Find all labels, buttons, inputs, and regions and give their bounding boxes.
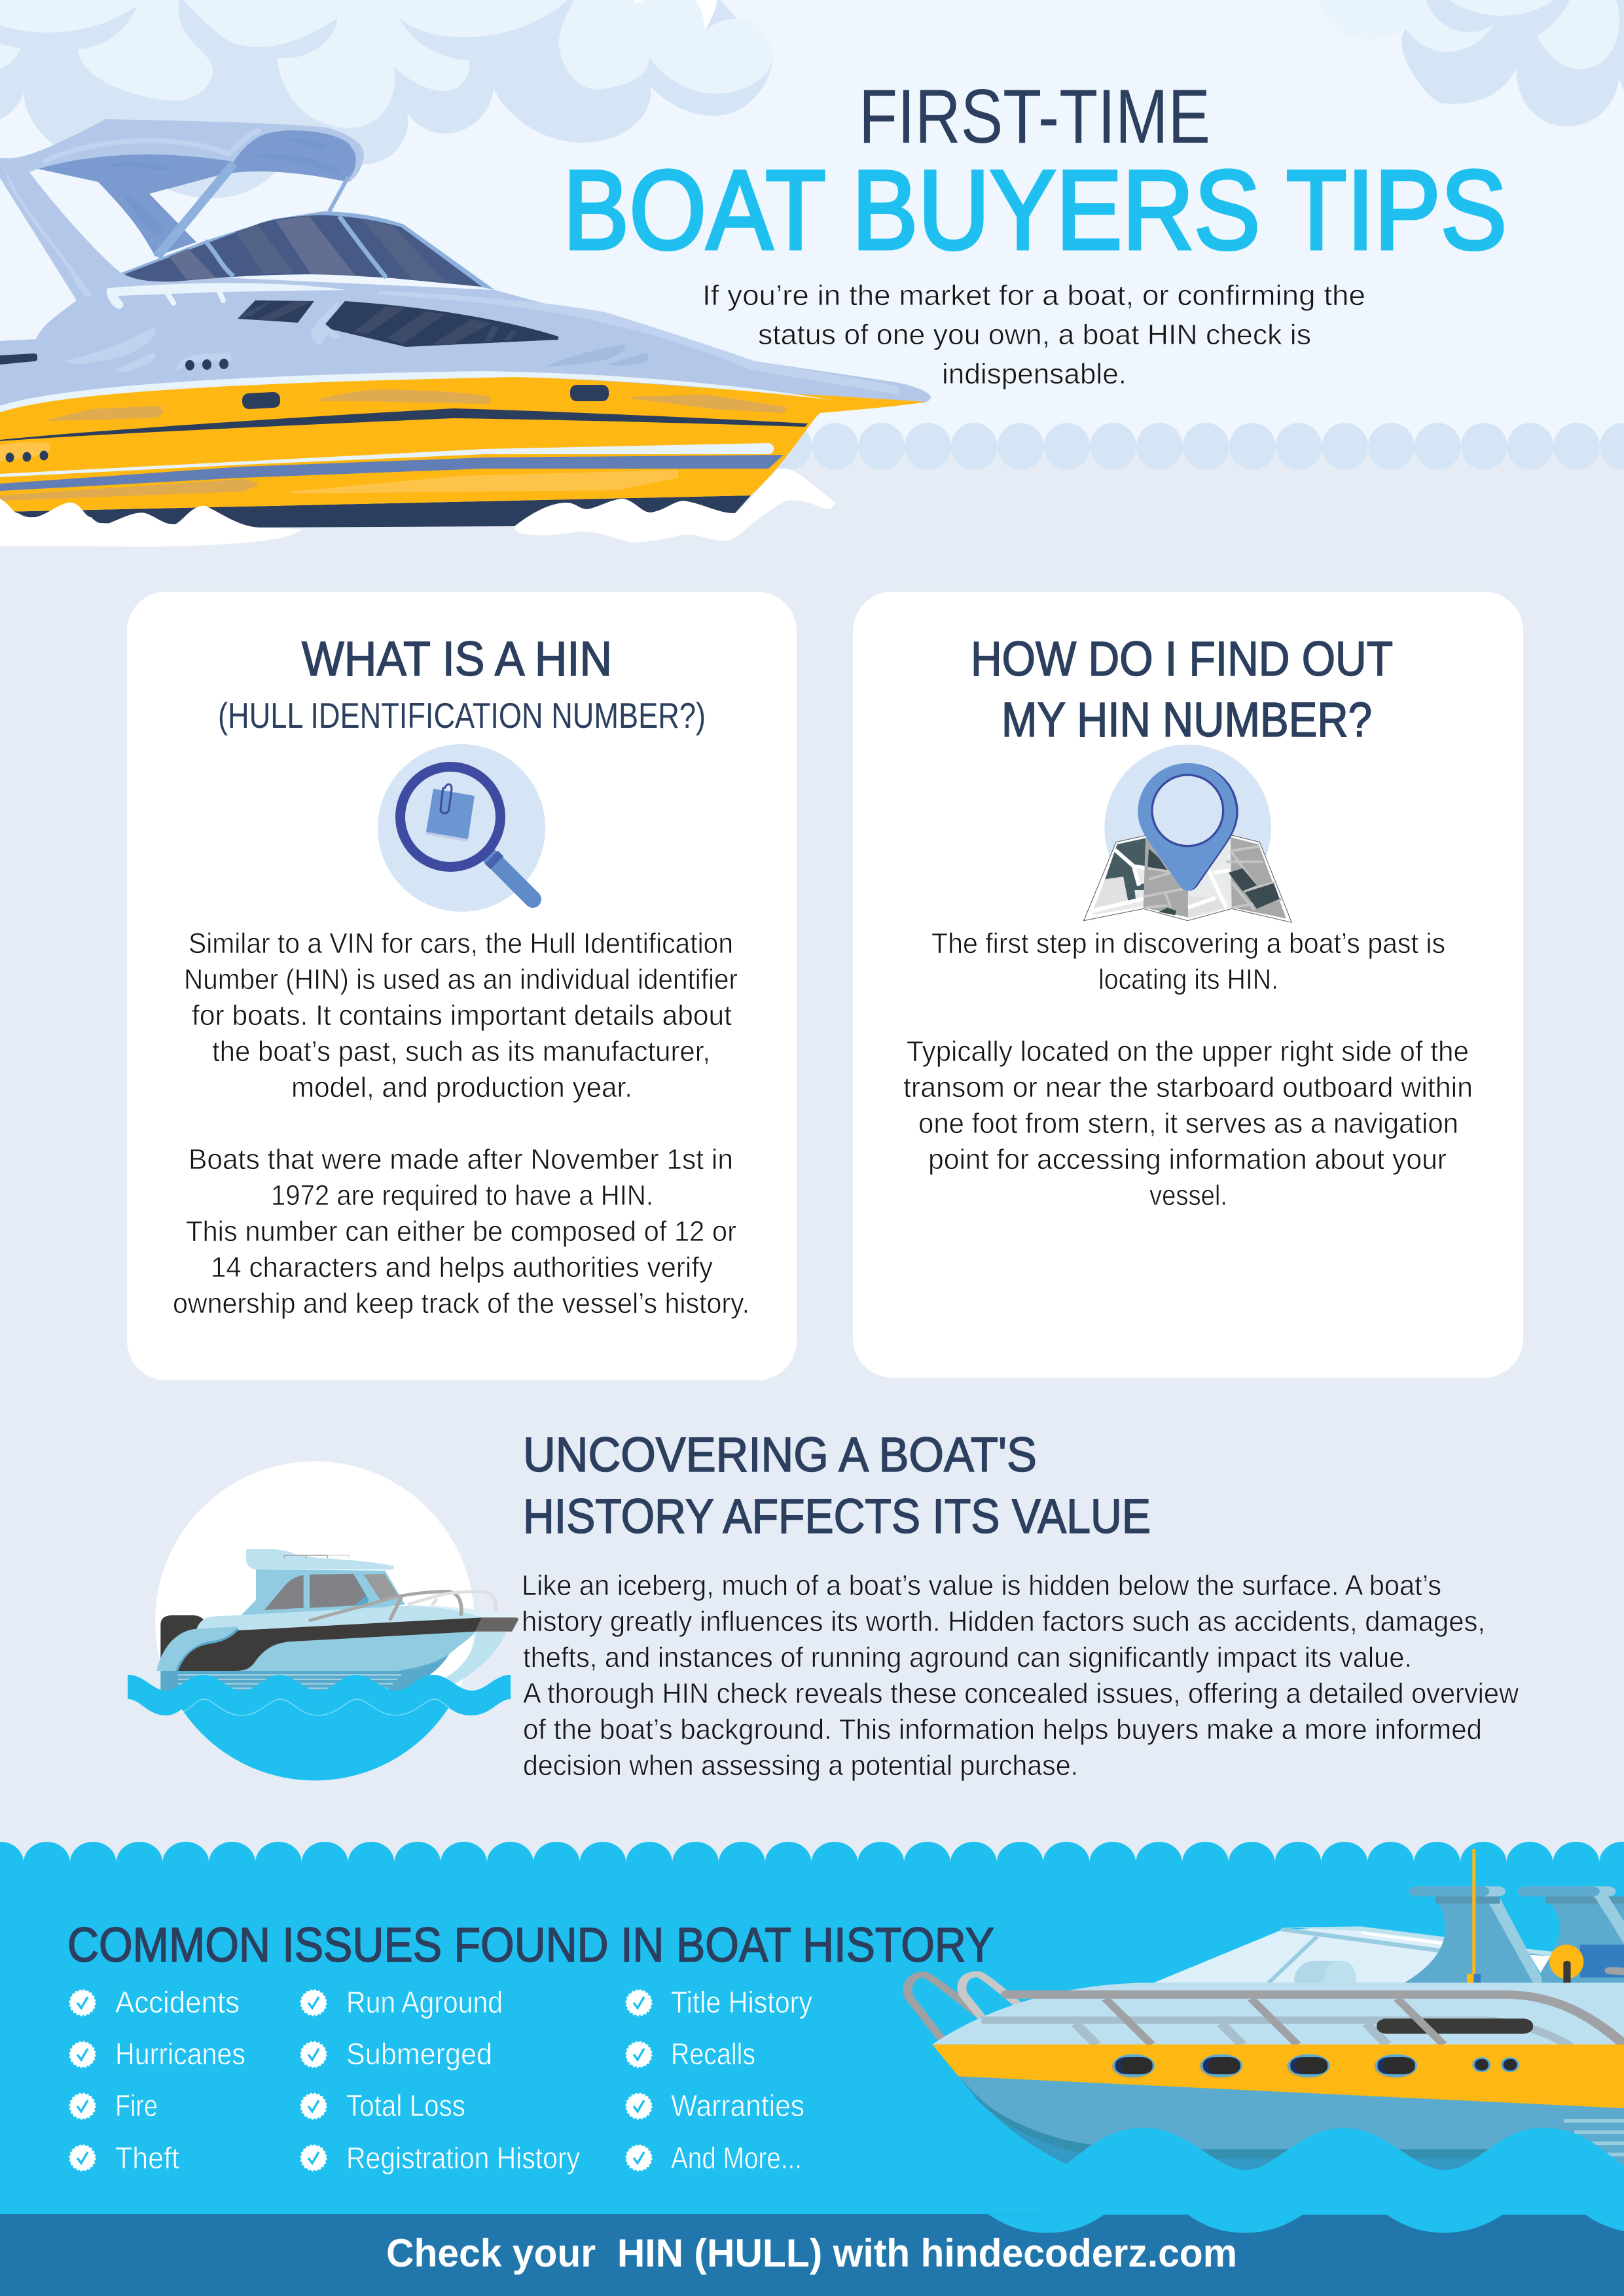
checklist: column 2: Run Aground <box>346 1985 503 2019</box>
icon: magnifying glass <box>378 744 545 912</box>
panel: what is a HIN <box>127 592 797 1380</box>
checklist: column 2: Registration History <box>346 2141 580 2175</box>
checklist: column 1: Hurricanes <box>115 2037 245 2071</box>
heading: uncovering a boat's history: UNCOVERING A BOAT'S <box>523 1427 1037 1482</box>
footer call to action: Check your HIN (HULL) with hindecoderz.com <box>386 2231 1237 2275</box>
body text: what is a HIN: 14 characters and helps authorities verify <box>211 1251 713 1283</box>
panel: how do I find my HIN <box>853 592 1523 1378</box>
text block: boat history value: decision when assessing a potential purchase. <box>523 1749 1078 1782</box>
body text: how do I find my HIN: locating its HIN. <box>1098 963 1278 996</box>
title: FIRST-TIME <box>859 73 1210 159</box>
icon: map with location pin <box>1084 745 1291 922</box>
body text: how do I find my HIN: Typically located on the upper right side of the <box>907 1035 1469 1067</box>
panel: common issues band <box>0 1841 1624 2296</box>
title <box>563 73 1507 273</box>
intro paragraph: indispensable. <box>942 358 1127 390</box>
checklist: column 1 <box>70 1985 245 2175</box>
body text: how do I find my HIN <box>903 927 1473 1211</box>
body text: what is a HIN: This number can either be composed of 12 or <box>186 1215 736 1247</box>
body text: what is a HIN <box>173 927 749 1319</box>
body text: what is a HIN: the boat’s past, such as its manufacturer, <box>212 1035 710 1067</box>
illustration: hero yacht <box>0 119 931 547</box>
checklist: column 1: Theft <box>115 2141 179 2175</box>
body text: how do I find my HIN: point for accessing information about your <box>928 1143 1447 1175</box>
body text: what is a HIN: 1972 are required to have a HIN. <box>271 1179 653 1211</box>
title: BOAT BUYERS TIPS <box>563 147 1507 273</box>
text block: boat history value: of the boat’s background. This information helps buyers make a more informed <box>523 1713 1482 1746</box>
body text: what is a HIN: Boats that were made after November 1st in <box>189 1143 733 1175</box>
illustration: boat on water in circle <box>128 1462 518 1780</box>
checklist: column 3: Warranties <box>671 2089 804 2123</box>
checklist: column 2: Submerged <box>346 2037 492 2071</box>
body text: how do I find my HIN: one foot from stern, it serves as a navigation <box>918 1107 1458 1139</box>
heading: how do I find out my HIN number: MY HIN NUMBER? <box>1001 692 1372 747</box>
heading: how do I find out my HIN number <box>971 632 1393 747</box>
body text: what is a HIN: Similar to a VIN for cars, the Hull Identification <box>189 927 733 960</box>
intro paragraph: status of one you own, a boat HIN check is <box>758 319 1311 351</box>
text block: boat history value: history greatly influences its worth. Hidden factors such as accidents, damages, <box>522 1605 1485 1638</box>
text block: boat history value: thefts, and instances of running aground can significantly impact its value. <box>523 1641 1412 1674</box>
heading: uncovering a boat's history: HISTORY AFFECTS ITS VALUE <box>523 1489 1151 1543</box>
heading: uncovering a boat's history <box>523 1427 1151 1543</box>
checklist: column 3: Recalls <box>671 2037 755 2071</box>
body text: how do I find my HIN: vessel. <box>1149 1179 1227 1211</box>
checklist: column 3: Title History <box>671 1985 812 2019</box>
heading: what is a HIN: WHAT IS A HIN <box>302 632 612 686</box>
checklist: column 2: Total Loss <box>346 2089 465 2123</box>
text block: boat history value: A thorough HIN check reveals these concealed issues, offering a detailed overview <box>523 1677 1519 1710</box>
heading: common issues: COMMON ISSUES FOUND IN BOAT HISTORY <box>67 1918 994 1972</box>
checklist: column 2 <box>301 1985 580 2175</box>
body text: what is a HIN: for boats. It contains important details about <box>192 999 732 1031</box>
sky clouds <box>0 0 1624 198</box>
heading: how do I find out my HIN number: HOW DO I FIND OUT <box>971 632 1393 686</box>
intro paragraph: If you’re in the market for a boat, or confirming the <box>702 279 1365 312</box>
illustration: yacht at bottom right <box>907 1849 1624 2233</box>
heading: what is a HIN: (HULL IDENTIFICATION NUMBER?) <box>218 695 706 736</box>
body text: what is a HIN: ownership and keep track of the vessel’s history. <box>173 1287 749 1319</box>
text block: boat history value: Like an iceberg, much of a boat’s value is hidden below the surface. A boat’s <box>522 1570 1441 1602</box>
body text: what is a HIN: Number (HIN) is used as an individual identifier <box>184 963 738 996</box>
body text: what is a HIN: model, and production year. <box>291 1071 632 1103</box>
intro paragraph <box>702 279 1365 390</box>
checklist: column 1: Fire <box>115 2089 158 2123</box>
body text: how do I find my HIN: The first step in discovering a boat’s past is <box>931 927 1445 960</box>
checklist: column 3: And More... <box>671 2141 802 2175</box>
heading: what is a HIN <box>218 632 706 736</box>
checklist: column 3 <box>626 1985 812 2175</box>
text block: boat history value <box>522 1570 1519 1782</box>
body text: how do I find my HIN: transom or near the starboard outboard within <box>903 1071 1473 1103</box>
checklist: column 1: Accidents <box>115 1985 240 2019</box>
wave bead row <box>766 423 1624 470</box>
